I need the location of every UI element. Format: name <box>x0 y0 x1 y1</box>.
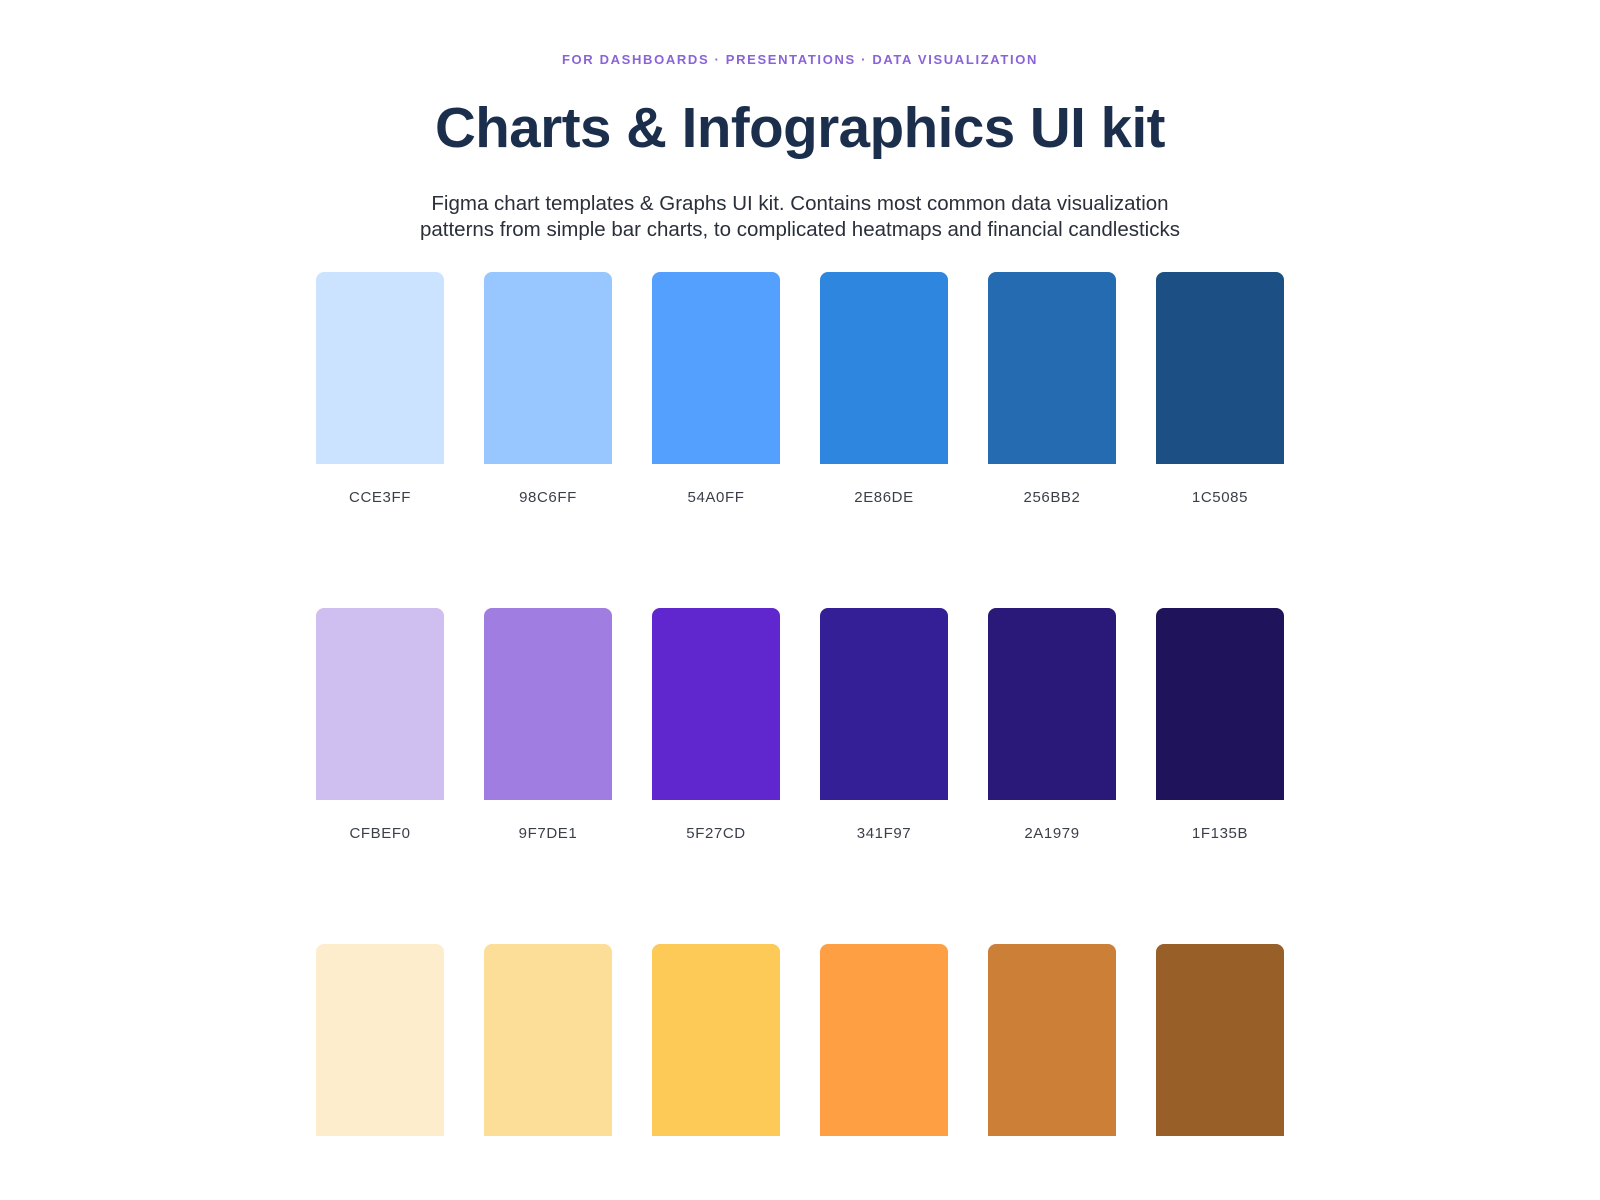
eyebrow label: FOR DASHBOARDS · PRESENTATIONS · DATA VISUALIZATION <box>562 52 1038 67</box>
swatch 341F97 <box>820 608 948 800</box>
label 341F97: 341F97 <box>857 825 911 842</box>
label 5F27CD: 5F27CD <box>686 825 746 842</box>
swatch 1F135B <box>1156 608 1284 800</box>
swatch 2A1979 <box>988 608 1116 800</box>
swatch light cream <box>316 944 444 1136</box>
swatch light yellow <box>484 944 612 1136</box>
swatch 5F27CD <box>652 608 780 800</box>
label 1F135B: 1F135B <box>1192 825 1248 842</box>
swatch 2E86DE <box>820 272 948 464</box>
swatch dark orange <box>988 944 1116 1136</box>
subtitle: Figma chart templates & Graphs UI kit. Contains most common data visualization <box>431 192 1169 215</box>
label CFBEF0: CFBEF0 <box>349 825 411 842</box>
label 2A1979: 2A1979 <box>1024 825 1080 842</box>
swatch 256BB2 <box>988 272 1116 464</box>
label 54A0FF: 54A0FF <box>688 489 744 506</box>
label 2E86DE: 2E86DE <box>854 489 914 506</box>
label CCE3FF: CCE3FF <box>349 489 411 506</box>
label 98C6FF: 98C6FF <box>519 489 577 506</box>
swatch yellow <box>652 944 780 1136</box>
panel: blue palette <box>316 272 1284 506</box>
label 1C5085: 1C5085 <box>1192 489 1248 506</box>
title: Charts & Infographics UI kit <box>435 96 1165 159</box>
swatch brown <box>1156 944 1284 1136</box>
swatch 54A0FF <box>652 272 780 464</box>
panel: purple palette <box>316 608 1284 842</box>
swatch orange <box>820 944 948 1136</box>
subtitle: patterns from simple bar charts, to complicated heatmaps and financial candlesticks <box>420 218 1180 241</box>
swatch 98C6FF <box>484 272 612 464</box>
swatch 1C5085 <box>1156 272 1284 464</box>
label 9F7DE1: 9F7DE1 <box>519 825 577 842</box>
panel: orange palette <box>316 944 1284 1136</box>
label 256BB2: 256BB2 <box>1024 489 1080 506</box>
swatch 9F7DE1 <box>484 608 612 800</box>
swatch CCE3FF <box>316 272 444 464</box>
subtitle <box>420 192 1180 241</box>
swatch CFBEF0 <box>316 608 444 800</box>
